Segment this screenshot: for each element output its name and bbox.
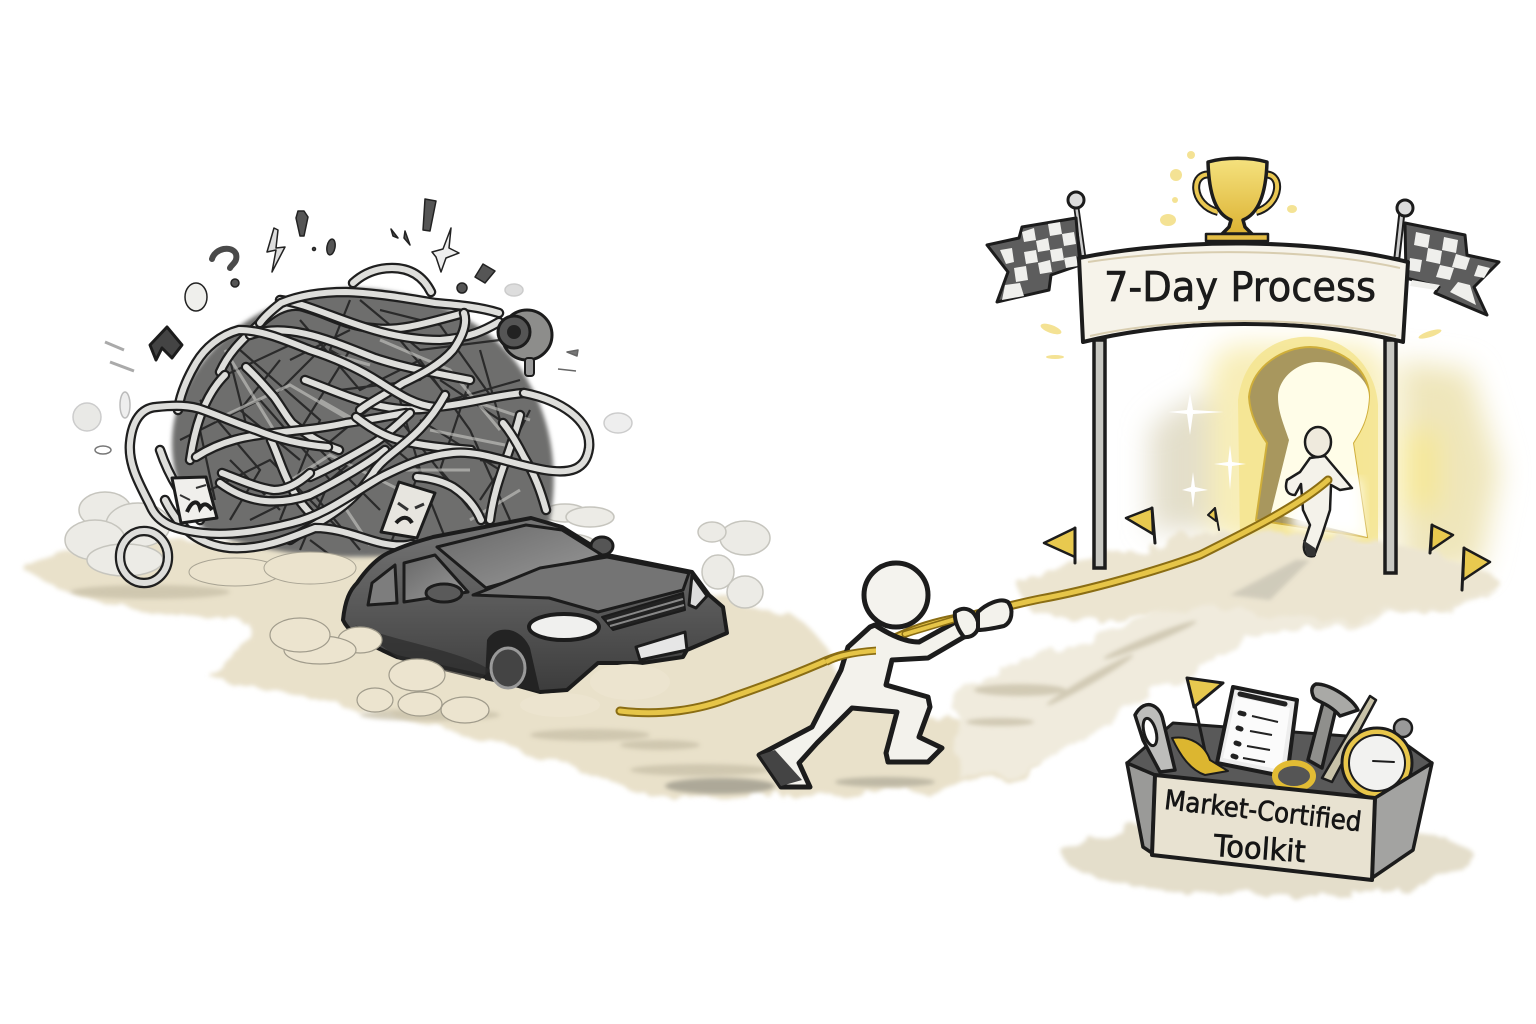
gold trophy (1196, 158, 1277, 241)
car: far mirror (591, 537, 613, 555)
symbol: block (475, 264, 495, 283)
mud bubbles at foot of the tangle (189, 552, 356, 586)
toolkit: screwdriver (1322, 696, 1376, 782)
car: mirror (426, 584, 462, 602)
finish banner (1079, 243, 1408, 342)
symbol: exclamation right (423, 199, 436, 231)
toolkit: gold tape ring (1275, 763, 1313, 789)
toolkit: gold scissors (1172, 737, 1228, 775)
ground: mud clouds behind the tangle (65, 492, 770, 608)
car: right headlight (689, 575, 707, 608)
walking figure in the gate (1286, 427, 1352, 556)
toolkit: wrench (1135, 705, 1175, 772)
left checkered flag (987, 192, 1084, 302)
toolkit: front label (1152, 775, 1375, 880)
figure: body (759, 620, 970, 787)
arch scene (987, 151, 1500, 620)
right checkered flag (1397, 200, 1499, 315)
market-certified toolkit (1065, 678, 1475, 896)
figure: dark shoe (760, 750, 802, 786)
toolkit: front label: Toolkit (1212, 829, 1307, 870)
symbol: spark (432, 228, 459, 272)
tangle: cables (120, 268, 589, 583)
toolkit: ground shadow (1065, 820, 1475, 896)
keyhole gate (1238, 337, 1378, 545)
sparkles (1168, 393, 1246, 508)
tangle: black connector at top left (150, 327, 182, 360)
figure: rope across chest (826, 650, 888, 662)
frustration symbols above tangle (73, 199, 632, 454)
toolkit: label text: Market-Cortified (1163, 785, 1363, 838)
car: side window (404, 555, 468, 602)
symbol: question mark (212, 249, 236, 268)
golden rope (620, 480, 1328, 713)
symbol: lightning (267, 228, 285, 272)
car: number plate (636, 632, 687, 660)
tangle: dark core (172, 288, 554, 557)
banner title: 7-Day Process (1104, 263, 1376, 311)
tangle of cables (120, 268, 589, 583)
toolkit: clipboard (1217, 687, 1297, 777)
figure: forward arm (876, 626, 962, 657)
toolkit: small flag (1187, 678, 1223, 765)
figure: rope over shoulder (905, 617, 962, 634)
car: wheel (485, 630, 540, 692)
symbol: bubble (185, 283, 207, 311)
mud bubbles around the car (270, 618, 670, 723)
gold confetti (1039, 151, 1442, 359)
car: hood (473, 557, 689, 612)
car: grille (602, 593, 685, 630)
tangle: angry plug right (381, 482, 435, 538)
toolkit: back of box (1127, 723, 1432, 800)
tangle: camera-like plug (498, 310, 552, 376)
toolkit: box sides (1127, 763, 1155, 853)
ground: muddy left bank (20, 535, 1042, 797)
left pole (1094, 340, 1105, 568)
toolkit: hammer (1308, 684, 1358, 768)
figure: head (864, 563, 928, 627)
figure: hands (955, 600, 1011, 637)
tangle: hatching (180, 300, 535, 555)
car: rear window (368, 565, 397, 605)
tangle: angry plug left (172, 477, 217, 523)
toolkit: stopwatch (1342, 719, 1412, 798)
right pole (1385, 340, 1396, 573)
ground under arch (1016, 531, 1500, 620)
car: windshield (437, 525, 602, 588)
symbol: exclamation (296, 211, 308, 236)
car stuck in mud (343, 518, 727, 692)
car: headlight (529, 614, 599, 640)
glow behind arch (1150, 345, 1500, 575)
small yellow marker flags (1044, 508, 1490, 590)
car: body (343, 518, 727, 692)
pulling figure (759, 563, 1011, 787)
ground: pale trail toward the arch (955, 590, 1500, 780)
ground: darker mud streaks (70, 585, 1198, 794)
